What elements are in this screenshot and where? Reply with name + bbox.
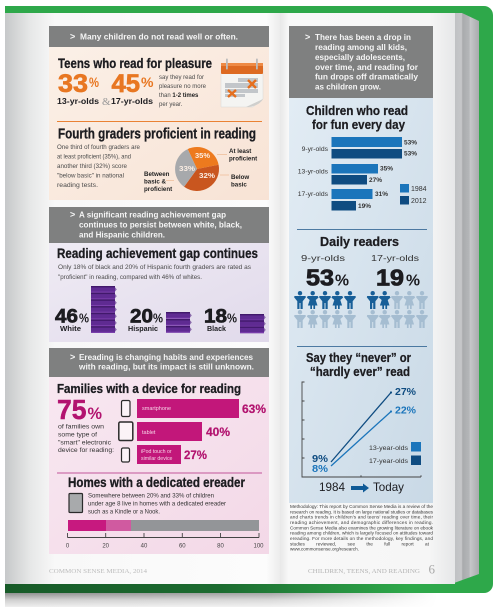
range bar chart: 80 xyxy=(217,544,224,550)
heading: children who read for fun: Children who read xyxy=(306,103,408,118)
bar: ipod: iPod touch or xyxy=(141,449,172,455)
range bar chart xyxy=(66,520,264,550)
divider xyxy=(297,345,427,348)
text: methodology: Methodology: This report by Common Sense Media is a review of the xyxy=(290,504,433,509)
text: frequency note: pleasure no more xyxy=(159,84,207,90)
text: methodology: reading among children, which is largely focused on attitudes toward xyxy=(290,531,433,536)
heading: daily readers: Daily readers xyxy=(320,235,399,249)
bar chart: read for fun: 27% xyxy=(369,177,382,184)
footer: page number: 6 xyxy=(428,562,436,576)
pie label: at least proficient: At least xyxy=(229,148,251,155)
icon: tablet xyxy=(119,422,133,440)
icon: smartphone xyxy=(122,400,130,416)
footer: left page credit: COMMON SENSE MEDIA, 2014 xyxy=(49,569,147,575)
stat: 45% 17-yr-olds: % xyxy=(141,74,154,90)
stat: 75% xyxy=(57,394,102,425)
legend: 1984 and 2012: 2012 xyxy=(411,198,427,205)
legend: 1984 and 2012 xyxy=(400,184,427,205)
heading: children who read for fun: for fun every day xyxy=(312,117,406,132)
bar: tablet: 40% xyxy=(206,425,230,439)
text: gap description xyxy=(58,265,251,281)
range bar chart: 0 xyxy=(66,544,70,550)
heading: gap continues: Reading achievement gap continues xyxy=(57,245,258,261)
stat: 20% hispanic xyxy=(128,306,163,333)
stat: 45% 17-yr-olds: 45 xyxy=(112,70,140,98)
pie label: between basic and proficient xyxy=(144,171,172,193)
bar chart: read for fun xyxy=(298,137,417,210)
bar: tablet xyxy=(137,422,230,441)
panel: drop in reading xyxy=(289,26,433,503)
book shadow xyxy=(5,593,485,607)
stat: 9-yr-olds 53%: 9-yr-olds xyxy=(301,253,345,263)
line chart: 22% xyxy=(395,404,417,416)
heading bar: Ereading is changing habits and experiences xyxy=(79,353,254,362)
stat: 9-yr-olds 53%: 53 xyxy=(306,264,334,290)
left page xyxy=(5,13,280,584)
panel background lavender xyxy=(49,243,269,342)
pie label: between basic and proficient: basic & xyxy=(144,178,167,186)
axis caption: 1984 to today: 1984 xyxy=(319,480,345,494)
bar: smartphone xyxy=(137,399,266,418)
pie chart: 33% xyxy=(179,164,195,173)
stat: 46% white: 46 xyxy=(55,306,78,328)
pictogram: 17-yr-olds people xyxy=(367,291,428,328)
panel: ereading xyxy=(49,348,269,554)
line chart: 27% xyxy=(395,386,417,398)
stat: 45% 17-yr-olds: 17-yr-olds xyxy=(111,97,154,106)
ampersand: & xyxy=(102,96,111,108)
icon: ipod xyxy=(122,448,130,462)
text: frequency note: per year. xyxy=(159,102,183,108)
range bar chart: 100 xyxy=(253,544,264,550)
text: frequency note xyxy=(159,75,207,108)
page stack edge xyxy=(454,13,479,583)
bar chart: read for fun: 35% xyxy=(380,166,393,172)
heading bar: with reading, but its impact is still unknown. xyxy=(78,362,254,372)
stat: 33% 13-yr-olds: % xyxy=(89,74,99,90)
heading bar: fun drops off dramatically xyxy=(315,72,419,82)
text: families own: "smart" electronic xyxy=(58,440,111,446)
line chart: 9% xyxy=(312,453,329,465)
heading: dedicated ereader: Homes with a dedicated ereader xyxy=(68,475,246,490)
bar: tablet: tablet xyxy=(142,430,156,436)
text: methodology xyxy=(290,504,434,552)
bar: ipod: 27% xyxy=(184,448,207,462)
bar: ipod xyxy=(137,445,207,464)
axis caption: 1984 to today xyxy=(319,480,404,494)
text: methodology: and charts trends in children's and teens' reading over time, their xyxy=(290,515,433,520)
pie chart xyxy=(175,147,219,191)
heading: teens who read for pleasure: Teens who read for pleasure xyxy=(58,55,212,71)
icon: calendar xyxy=(221,58,263,107)
text: gap description: "proficient" in reading, compared with 46% of whites. xyxy=(58,275,202,281)
text: methodology: Common Sense Media also examines the growing literature on ebook xyxy=(290,525,434,530)
stat: 20% hispanic: Hispanic xyxy=(128,324,158,333)
heading bar xyxy=(289,26,433,98)
bar chart: read for fun: 53% xyxy=(404,140,417,146)
bar chart: read for fun: 31% xyxy=(375,191,388,198)
stat: 33% 13-yr-olds xyxy=(57,70,100,106)
heading bar: > xyxy=(70,210,75,220)
legend: age groups: 17-year-olds xyxy=(369,458,408,465)
pie label: between basic and proficient: Between xyxy=(144,171,170,178)
bar: smartphone: 63% xyxy=(242,402,266,416)
text: frequency note: than 1-2 times xyxy=(159,93,199,99)
heading: never or hardly ever xyxy=(306,350,411,379)
pictogram: 9-yr-olds people xyxy=(294,291,356,328)
stat: 18% black xyxy=(204,306,237,333)
text: ereader description: such as a Kindle or a Nook. xyxy=(88,510,160,516)
heading: never or hardly ever: Say they “never” or xyxy=(306,350,411,365)
stat: 18% black: % xyxy=(227,310,237,326)
text: families own xyxy=(58,424,114,454)
range bar chart: 20 xyxy=(102,544,110,550)
stat: 33% 13-yr-olds: 13-yr-olds xyxy=(57,97,100,106)
text: proficiency paragraph xyxy=(57,145,141,189)
text: proficiency paragraph: "below basic" in national xyxy=(57,174,124,180)
heading bar xyxy=(49,348,269,377)
icon: book stack black xyxy=(240,314,266,333)
stat: 18% black: 18 xyxy=(204,306,227,328)
heading: fourth graders: Fourth graders proficient in reading xyxy=(58,126,256,142)
footer: right page title: CHILDREN, TEENS, AND READING xyxy=(308,569,421,575)
pie chart: 35% xyxy=(195,151,210,160)
stat: 9-yr-olds 53% xyxy=(301,253,349,290)
heading bar: especially adolescents, xyxy=(315,53,405,62)
heading bar: > xyxy=(70,32,75,42)
stat: 17-yr-olds 19% xyxy=(371,253,420,290)
range bar chart: 60 xyxy=(179,544,186,550)
text: methodology: reading achievement, and demographic differences in reading. xyxy=(290,520,433,525)
pie label: below basic: Below xyxy=(231,174,249,181)
icon: ereader xyxy=(69,494,82,512)
pie label: between basic and proficient: proficient xyxy=(144,186,172,193)
stat: 20% hispanic: 20 xyxy=(130,306,153,328)
pie label: at least proficient xyxy=(229,148,257,162)
divider xyxy=(297,228,427,231)
text: families own: of families own xyxy=(58,424,105,430)
heading bar: continues to persist between white, black, xyxy=(79,220,242,230)
stat: 75%: 75 xyxy=(57,394,86,425)
panel background pink xyxy=(49,377,269,554)
line chart xyxy=(302,382,421,477)
bar chart: read for fun: 17-yr-olds xyxy=(298,191,329,198)
divider xyxy=(57,472,262,474)
stat: 18% black: Black xyxy=(207,324,227,333)
heading bar: Many children do not read well or often. xyxy=(80,32,238,42)
panel: many children do not read well xyxy=(49,26,269,200)
stat: 46% white: White xyxy=(60,324,81,333)
heading bar xyxy=(49,26,269,47)
range bar chart: 40 xyxy=(141,544,148,550)
stat: 46% white xyxy=(55,306,89,333)
legend: age groups xyxy=(369,442,421,465)
arrow xyxy=(351,484,369,492)
text: families own: some type of xyxy=(58,432,97,438)
heading: children who read for fun xyxy=(306,103,408,132)
bar: ipod: similar device xyxy=(141,456,173,462)
bar: smartphone: smartphone xyxy=(142,406,171,412)
text: proficiency paragraph: at least proficient (35%), and xyxy=(57,154,131,160)
text: ereader description: Somewhere between 20% and 33% of children xyxy=(88,494,214,500)
heading: families with a device: Families with a device for reading xyxy=(57,381,241,396)
stat: 9-yr-olds 53%: % xyxy=(335,272,349,290)
pie connector lines xyxy=(166,154,229,180)
heading bar: reading among all kids, xyxy=(315,43,407,52)
heading bar: and Hispanic children. xyxy=(79,230,165,240)
pie label: below basic xyxy=(231,174,249,188)
stat: 17-yr-olds 19%: % xyxy=(406,272,420,290)
bar chart: read for fun: 53% xyxy=(404,150,417,158)
panel background peach xyxy=(49,47,269,200)
right page xyxy=(280,13,455,584)
text: gap description: Only 18% of black and 20% of Hispanic fourth graders are rated as xyxy=(58,265,251,271)
pie chart: 32% xyxy=(199,171,215,180)
heading: never or hardly ever: “hardly ever” read xyxy=(310,364,410,379)
icon: book stack white xyxy=(91,286,117,333)
text: methodology: ereading. For more details on the methodology, key findings, and xyxy=(290,536,433,541)
heading bar: as children grow. xyxy=(315,82,381,92)
bar chart: read for fun: 9-yr-olds xyxy=(302,146,329,153)
stat: 20% hispanic: % xyxy=(153,310,163,326)
pie label: at least proficient: proficient xyxy=(229,156,257,162)
stat: 45% 17-yr-olds xyxy=(111,70,154,106)
heading bar: over time, and reading for xyxy=(315,63,418,72)
heading bar xyxy=(49,207,269,243)
text: ereader description: under age 8 live in homes with a dedicated ereader xyxy=(88,502,226,508)
text: proficiency paragraph: reading tests. xyxy=(57,183,98,189)
pie label: below basic: basic xyxy=(231,182,247,188)
icon: book stack hispanic xyxy=(166,312,192,333)
heading bar: There has been a drop in xyxy=(315,33,411,42)
text: families own: device for reading: xyxy=(58,447,114,454)
stat: 46% white: % xyxy=(79,310,89,326)
axis caption: 1984 to today: Today xyxy=(373,480,404,494)
panel: reading achievement gap xyxy=(49,207,269,342)
legend: 1984 and 2012: 1984 xyxy=(411,186,427,193)
legend: age groups: 13-year-olds xyxy=(369,445,408,452)
stat: 17-yr-olds 19%: 17-yr-olds xyxy=(371,253,419,263)
panel background blue xyxy=(289,98,433,503)
line chart: 8% xyxy=(312,463,329,475)
text: proficiency paragraph: One third of fourth graders are xyxy=(57,145,141,151)
text: methodology: studies reviewed, see the full report at xyxy=(290,541,430,546)
divider xyxy=(57,120,262,123)
text: ereader description xyxy=(88,494,226,516)
text: proficiency paragraph: another third (32%) score xyxy=(57,164,128,170)
stat: 75%: % xyxy=(88,404,102,423)
bar chart: read for fun: 19% xyxy=(358,203,371,210)
heading bar: > xyxy=(305,32,310,42)
stat: 17-yr-olds 19%: 19 xyxy=(376,264,404,290)
stat: 33% 13-yr-olds: 33 xyxy=(58,70,88,98)
text: frequency note: say they read for xyxy=(159,75,204,81)
heading bar: A significant reading achievement gap xyxy=(79,210,226,220)
text: methodology: www.commonsense.org/research. xyxy=(290,547,359,552)
heading bar: > xyxy=(70,352,75,362)
bar chart: read for fun: 13-yr-olds xyxy=(298,168,329,176)
text: methodology: research on reading. It is based on large national studies or databases xyxy=(290,509,434,514)
